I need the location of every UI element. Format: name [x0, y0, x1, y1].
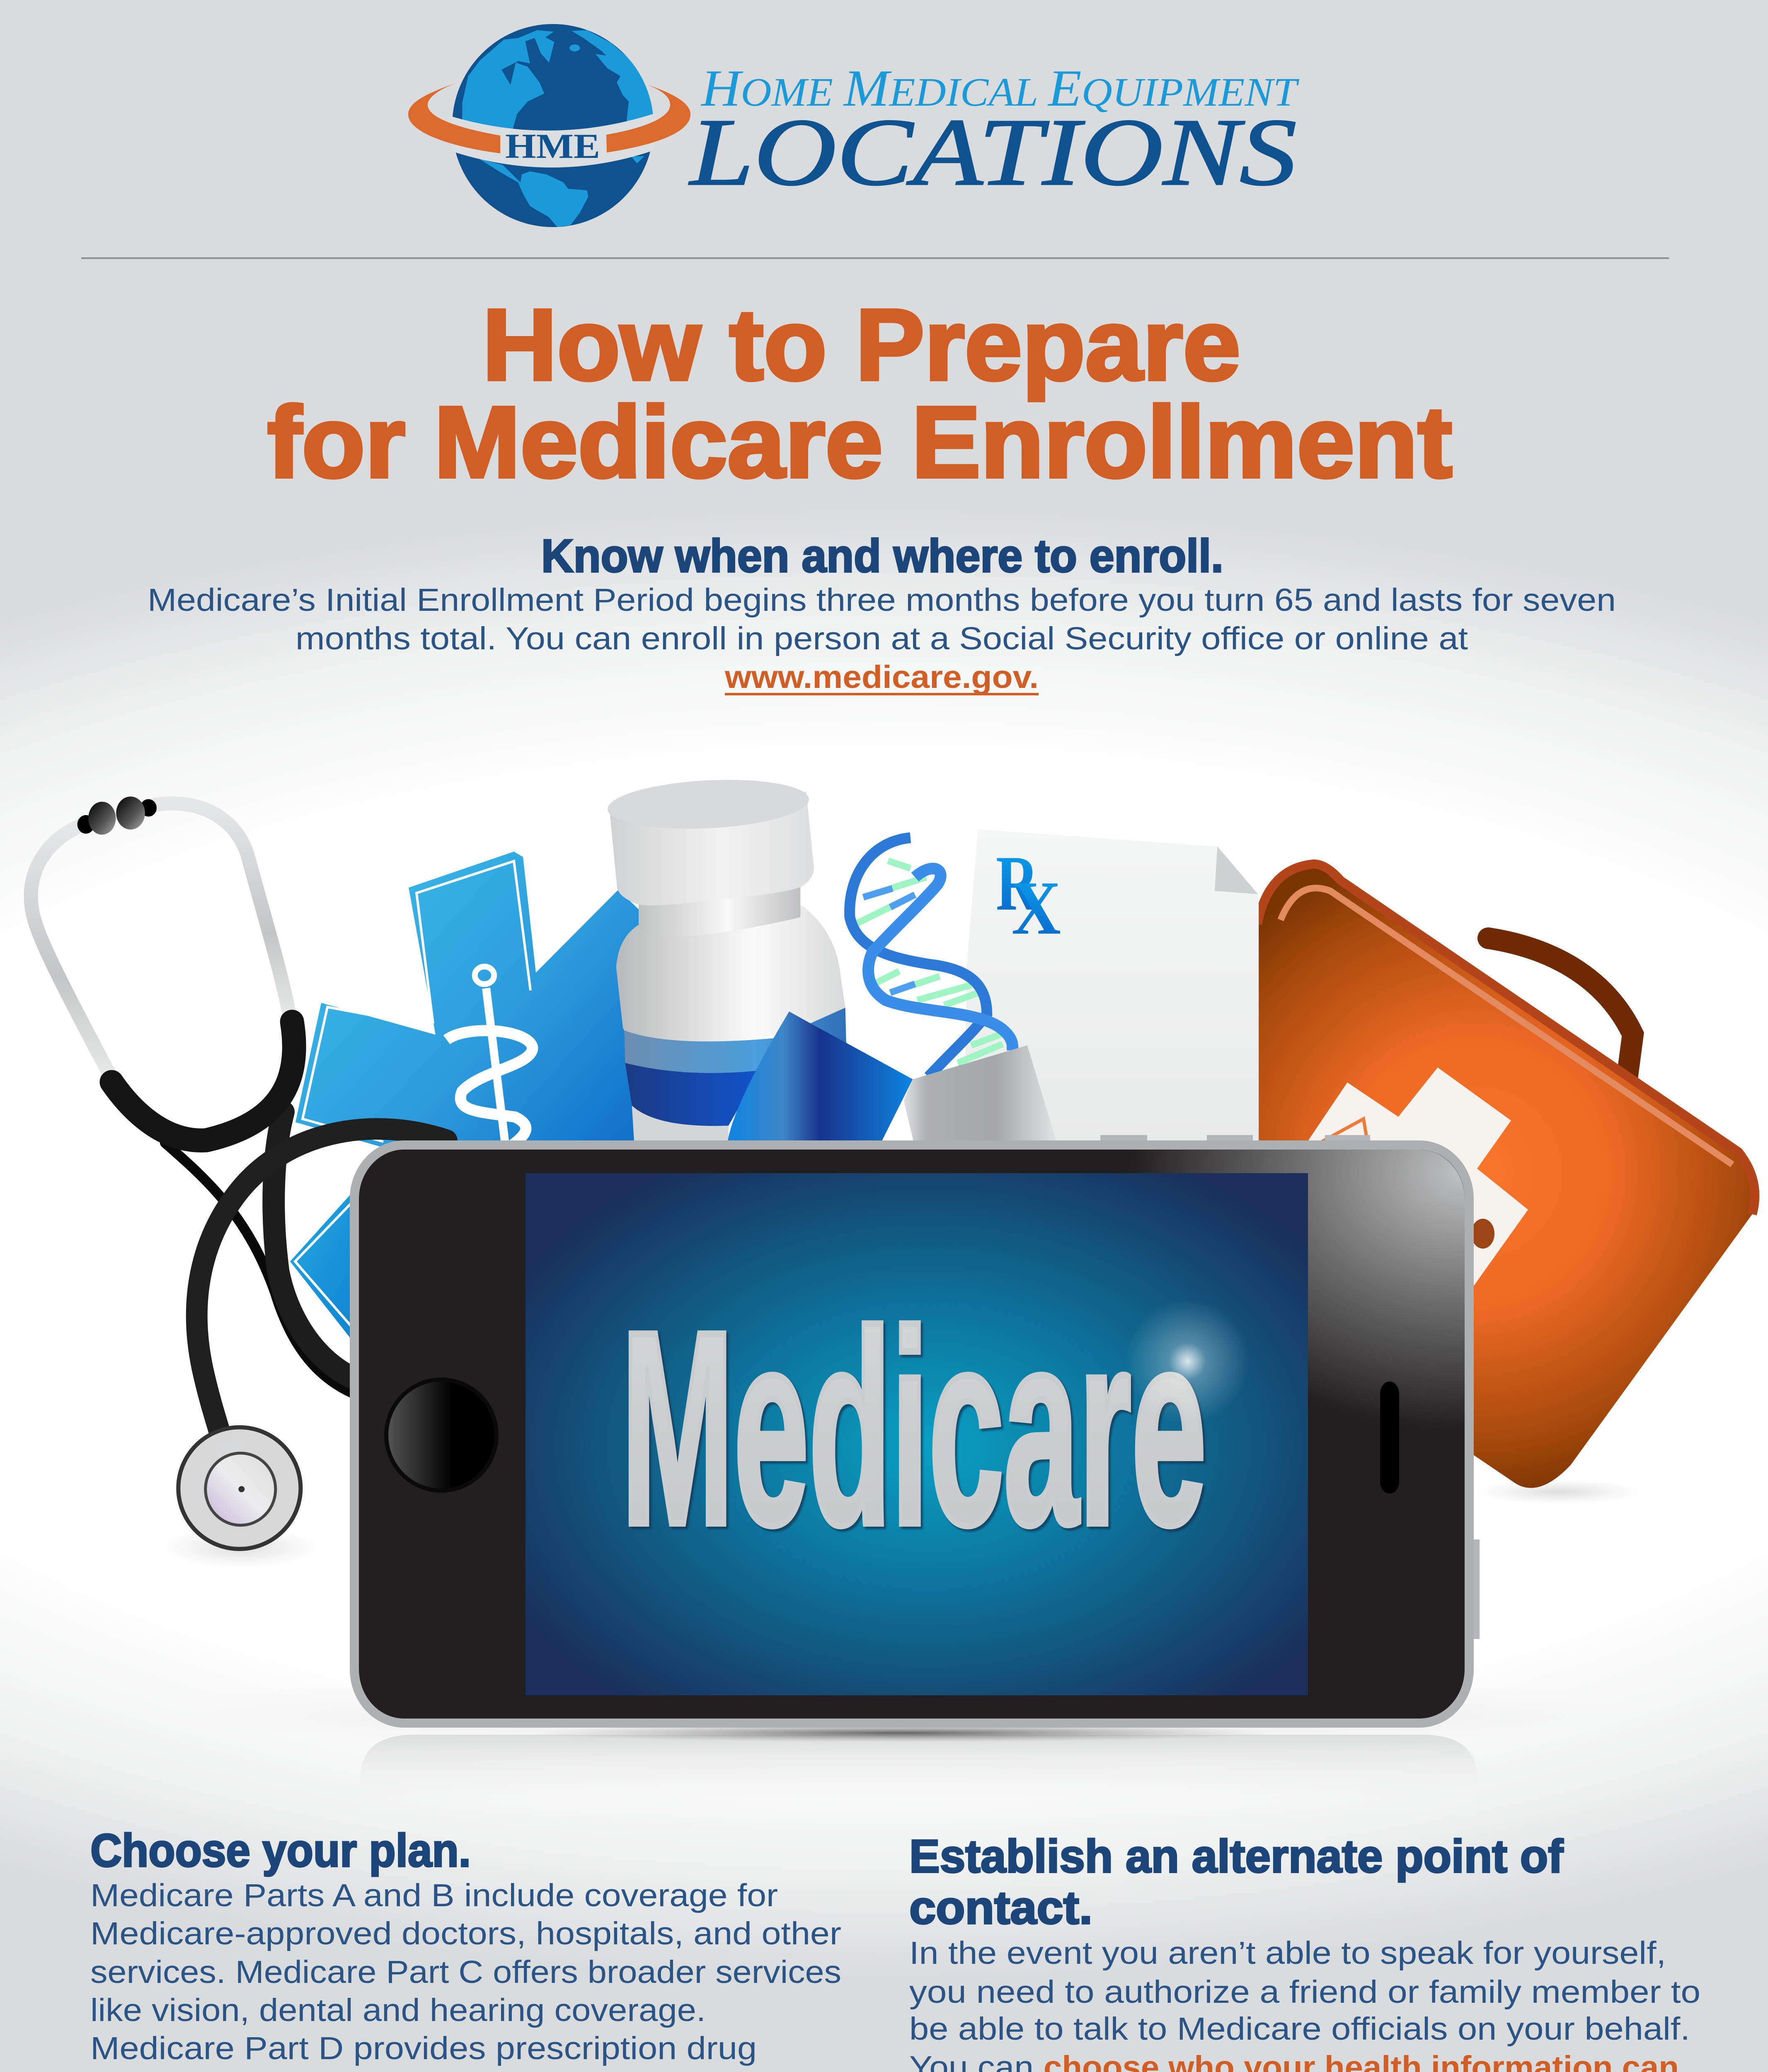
icon: prescription paper: X [1012, 866, 1061, 951]
title [267, 288, 1452, 499]
icon: blue ribbon [728, 1012, 913, 1142]
phone reflection [177, 1666, 1628, 1819]
icon: smartphone [354, 1135, 1480, 1723]
icon: ribbon around globe [408, 82, 690, 167]
phone home button [386, 1380, 496, 1491]
title: for Medicare Enrollment [267, 385, 1452, 499]
text block: months total. You can enroll in person at a Social Security office or online at [295, 621, 1468, 656]
icon: DNA helix [850, 838, 1012, 1077]
icon: medical bag [1240, 864, 1755, 1504]
icon: stethoscope [31, 796, 447, 1568]
phone body [354, 1145, 1469, 1723]
logo tagline: HOME MEDICAL EQUIPMENT [700, 60, 1300, 117]
text block: www.medicare.gov. [724, 659, 1039, 695]
text block [90, 1878, 841, 2072]
icon: prescription paper [964, 829, 1259, 1141]
hero illustration [31, 775, 1755, 1819]
icon: silver wrap [904, 1046, 1056, 1142]
phone screen [526, 1173, 1308, 1695]
text block: Medicare Part D provides prescription drug [90, 2031, 757, 2066]
heading: Establish an alternate point of [909, 1830, 1564, 1882]
phone buttons [1100, 1135, 1480, 1639]
section: establish an alternate point of contact [909, 1830, 1700, 2072]
icon: rod of Asclepius [447, 967, 533, 1148]
section: choose your plan [90, 1825, 841, 2072]
icon: medicine bottle [603, 775, 1056, 1142]
intro: know when and where to enroll [148, 530, 1616, 695]
text block: you need to authorize a friend or family member to [909, 1974, 1700, 2010]
text block: like vision, dental and hearing coverage. [90, 1992, 706, 2028]
icon: globe [452, 24, 655, 227]
title: How to Prepare [482, 288, 1240, 401]
icon: prescription paper: R [996, 840, 1039, 927]
text block: services. Medicare Part C offers broader services [90, 1954, 841, 1990]
logo wordmark: LOCATIONS [688, 99, 1297, 206]
text block: Medicare-approved doctors, hospitals, and other [90, 1916, 841, 1951]
icon: white cross on bag [1243, 1067, 1528, 1289]
text block [148, 582, 1616, 695]
heading: contact. [909, 1882, 1092, 1934]
heading [909, 1830, 1564, 1934]
phone speaker [1380, 1382, 1399, 1493]
logo: Home Medical Equipment Locations [408, 24, 1300, 227]
text block: In the event you aren’t able to speak for yourself, [909, 1935, 1666, 1971]
heading: Choose your plan. [90, 1825, 471, 1876]
text block: be able to talk to Medicare officials on your behalf. [909, 2011, 1690, 2047]
text block: Medicare’s Initial Enrollment Period begins three months before you turn 65 and lasts for seven [148, 582, 1616, 618]
icon: star of life [290, 852, 684, 1339]
text block [909, 1935, 1700, 2072]
heading: Know when and where to enroll. [541, 530, 1223, 582]
icon: ribbon around globe: HME [505, 127, 600, 166]
text block: Medicare Parts A and B include coverage for [90, 1878, 778, 1913]
